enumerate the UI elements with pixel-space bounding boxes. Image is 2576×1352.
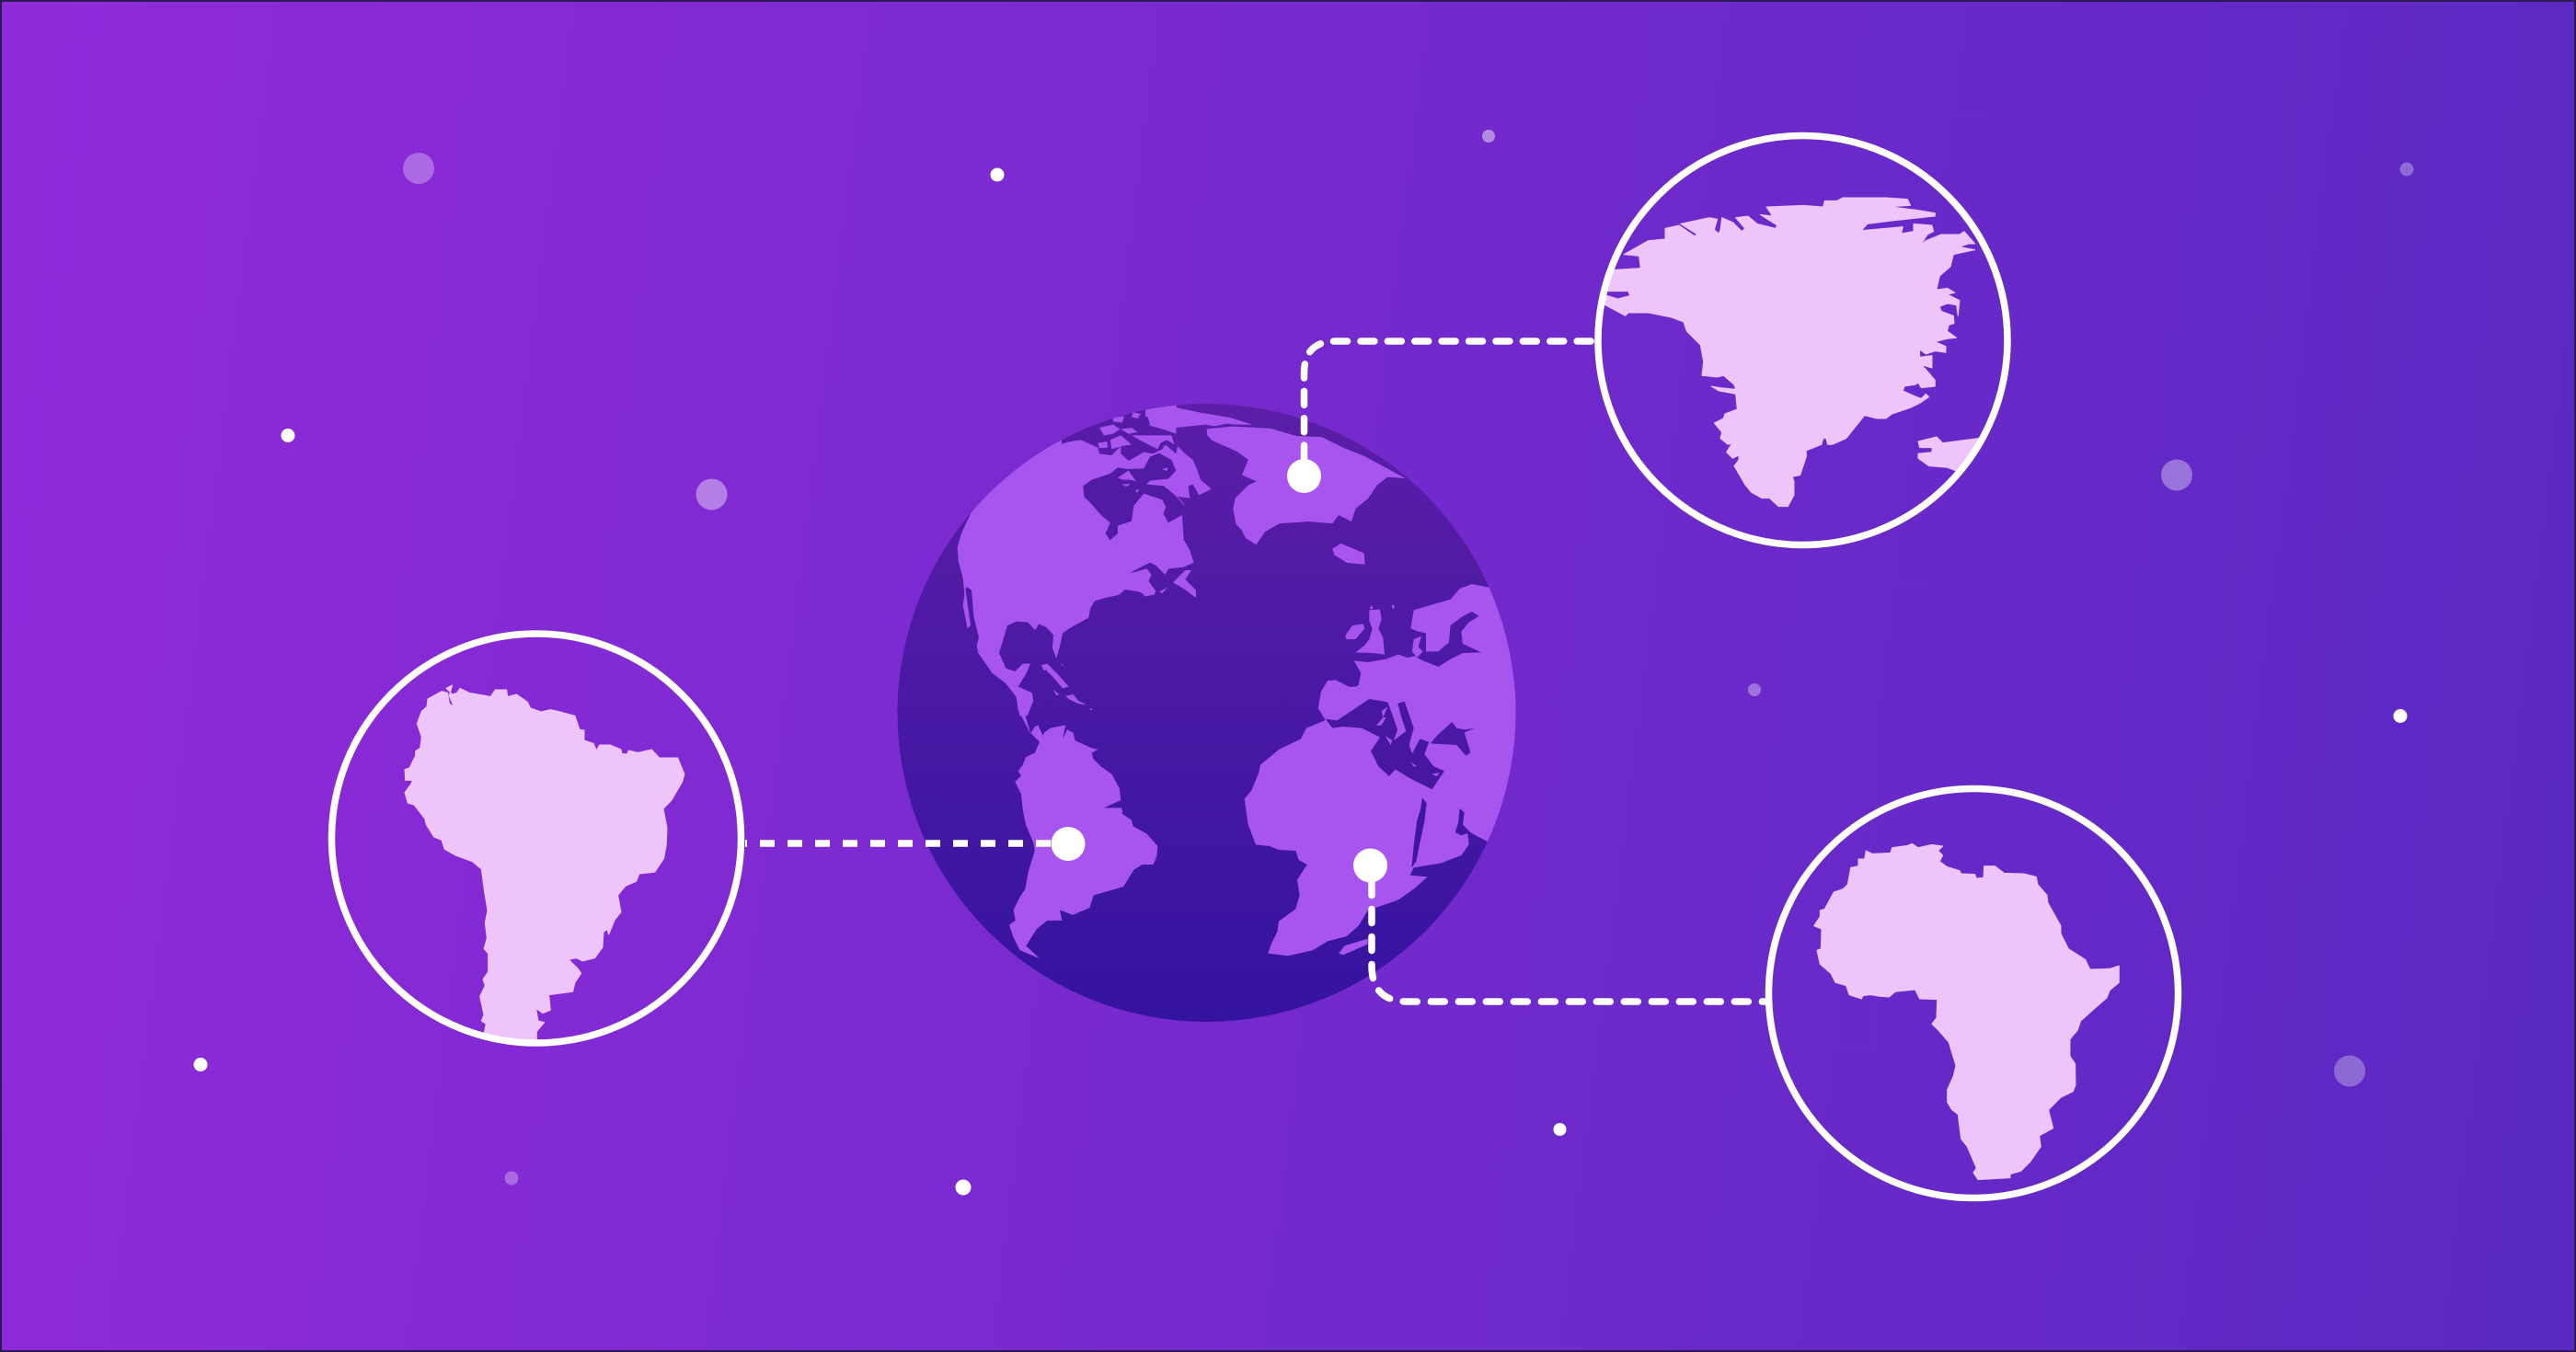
- pin: greenland: [1287, 459, 1321, 493]
- hudson bay: [1083, 453, 1184, 540]
- globe: [898, 404, 1516, 1022]
- europe: [1317, 584, 1516, 789]
- iceland on globe: [1332, 544, 1365, 565]
- pin: south america: [1051, 827, 1086, 861]
- callout: south america: [331, 634, 742, 1046]
- callout: greenland: [1598, 136, 2007, 544]
- pin: africa: [1353, 848, 1387, 883]
- arctic archipelago: [1062, 407, 1253, 461]
- connector: africa: [1372, 865, 1766, 1002]
- connector: greenland: [1305, 341, 1598, 475]
- connector: south america: [745, 840, 1051, 847]
- north america: [957, 405, 1211, 716]
- greenland on globe: [1207, 427, 1406, 544]
- hudson islands: [1118, 467, 1167, 493]
- background stars: [193, 130, 2414, 1196]
- central and south america: [1012, 682, 1157, 865]
- callout: africa: [1768, 789, 2179, 1197]
- africa and asia: [1245, 687, 1539, 956]
